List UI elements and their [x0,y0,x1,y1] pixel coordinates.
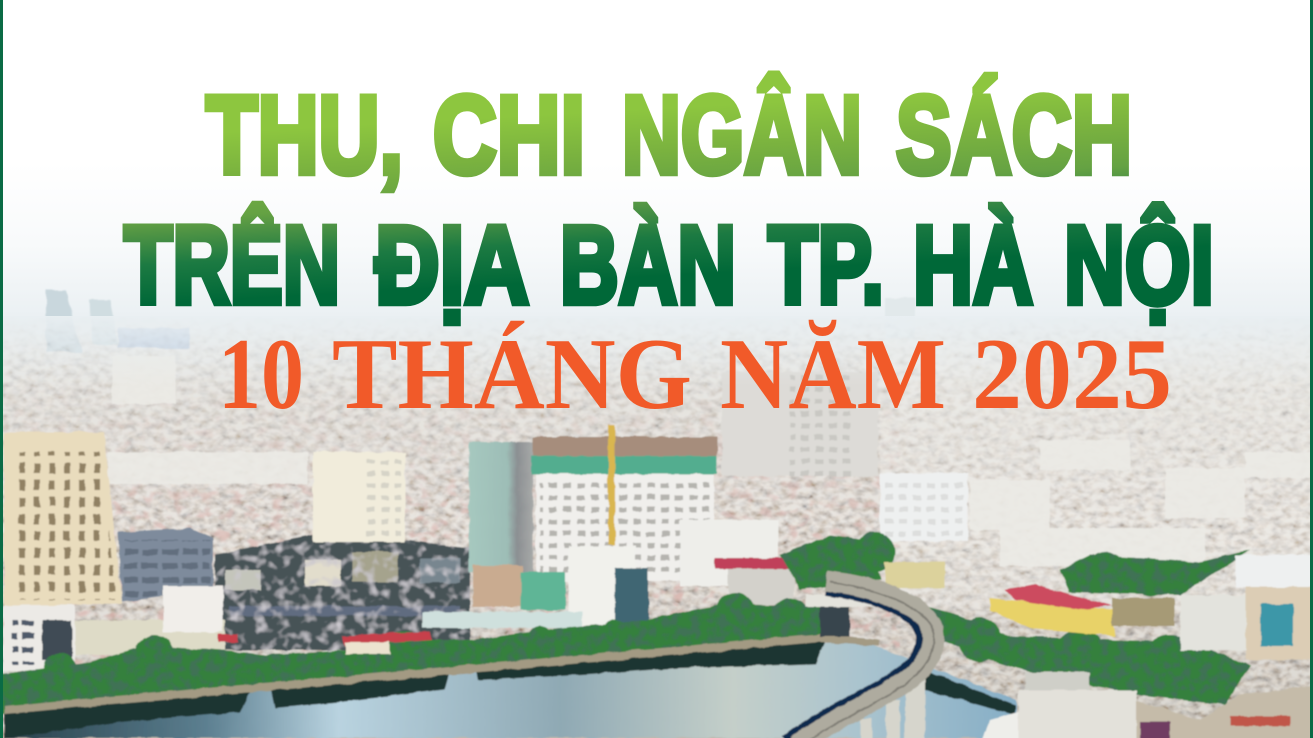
right side buildings [1180,555,1313,660]
construction tower [531,425,717,581]
trees along shore [0,532,1250,714]
pale district blocks [108,356,1310,566]
teal glass tower [469,442,533,607]
bottom right rooftops [1136,685,1313,738]
blue-grey office block [118,528,213,602]
elevated metro line [790,581,934,738]
subtitle date: NĂM [720,318,946,431]
city-to-sky haze [0,316,1313,386]
far apartment towers [722,372,878,476]
title line 1 [206,74,1132,197]
metro viaduct piers [860,672,925,738]
city photo [0,290,1313,738]
right border [1310,0,1313,738]
yellowish buildings behind park [885,562,945,588]
white station building [805,595,880,637]
red roof speckle [3,424,900,665]
white building foreground [980,672,1136,738]
left border [0,0,3,738]
yellow colonial building [990,584,1115,636]
title line 2: TP. [768,204,884,327]
shoreline promenade [4,634,880,714]
field [1112,598,1174,626]
title line 2: BÀN [560,204,736,327]
cream tower [4,432,122,606]
title line 2: HÀ [913,204,1033,327]
small red roof building [715,558,794,605]
sky background [0,0,1313,325]
subtitle date: 2025 [972,318,1172,431]
title line 2: TRÊN [124,204,340,327]
title line 1: SÁCH [896,74,1132,197]
white tower right [880,473,968,541]
title line 2 [124,204,1214,327]
right district lightening [880,340,1313,610]
title line 1: NGÂN [622,74,862,197]
title line 2: NỘI [1064,204,1214,327]
rooftops texture [0,318,1313,738]
subtitle date: 10 [218,318,304,431]
white annex [422,520,778,628]
water [4,640,1016,738]
white low blocks bottom left [3,586,225,671]
title line 2: ĐỊA [375,204,529,327]
distant towers [46,290,1222,352]
subtitle date: THÁNG [332,318,692,431]
red roof houses [218,632,432,654]
title line 1: CHI [433,74,585,197]
white tower centre-left [313,452,405,542]
dark mid-ground houses [215,535,470,650]
subtitle date [218,318,1172,431]
dark reflections [4,640,1015,738]
title line 1: THU, [206,74,403,197]
